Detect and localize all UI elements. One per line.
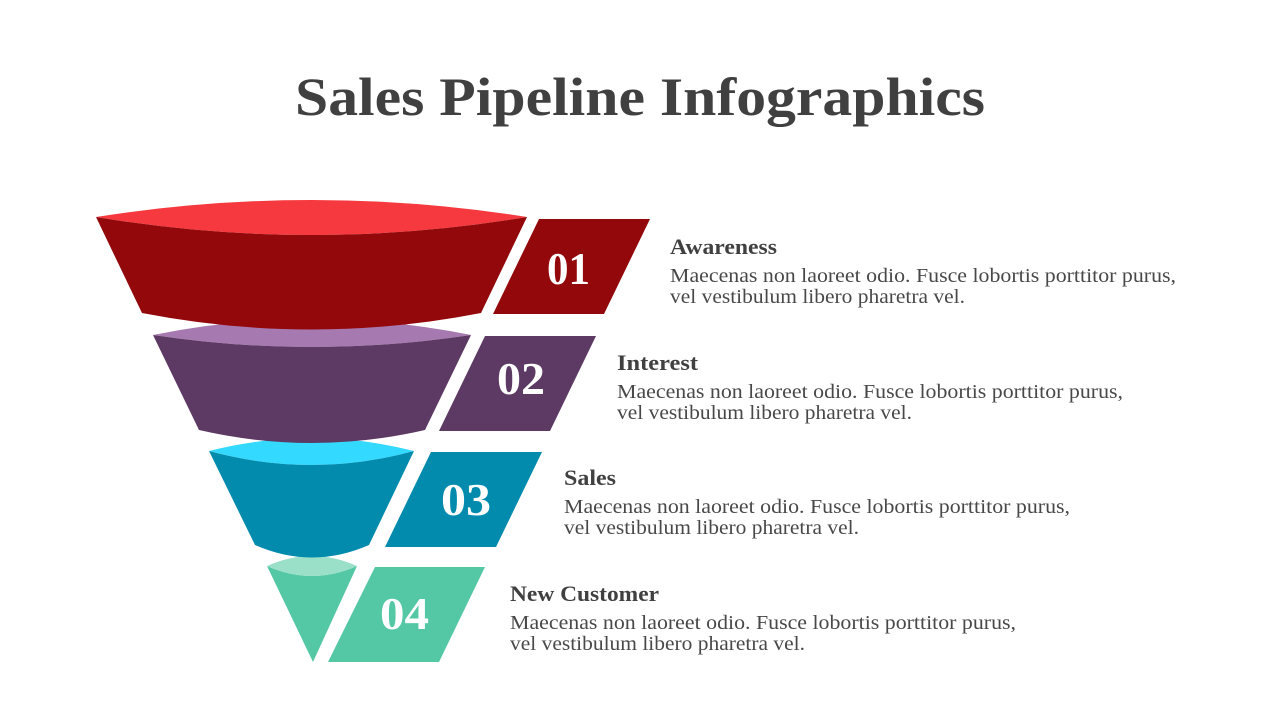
step 03: text block: [564, 465, 1070, 539]
step 02: text block: Interest: [617, 350, 699, 375]
funnel segment 2: [153, 319, 471, 443]
step 01: number tag: 01: [547, 244, 590, 294]
step 04: text block: [510, 581, 1016, 655]
funnel segment 1: [96, 200, 527, 330]
step 02: number tag: [439, 336, 596, 431]
step 01: text block: Awareness: [670, 234, 777, 259]
step 04: text block: vel vestibulum libero pharetra vel.: [510, 633, 805, 655]
step 02: text block: Maecenas non laoreet odio. Fusce lobortis porttitor purus,: [617, 381, 1123, 403]
funnel segment 3: [209, 438, 414, 558]
step 01: text block: vel vestibulum libero pharetra vel.: [670, 286, 965, 308]
step 04: text block: Maecenas non laoreet odio. Fusce lobortis porttitor purus,: [510, 612, 1016, 634]
step 03: text block: Sales: [564, 465, 616, 490]
step 02: text block: [617, 350, 1123, 424]
step 01: text block: [670, 234, 1176, 308]
step 04: number tag: [328, 567, 485, 662]
step 04: text block: New Customer: [510, 581, 659, 606]
step 01: text block: Maecenas non laoreet odio. Fusce lobortis porttitor purus,: [670, 265, 1176, 287]
funnel: [96, 200, 527, 662]
step 03: number tag: [385, 452, 542, 547]
funnel segment 4: [267, 556, 357, 662]
step 01: number tag: [493, 219, 650, 314]
title: Sales Pipeline Infographics: [295, 67, 985, 127]
step 02: text block: vel vestibulum libero pharetra vel.: [617, 402, 912, 424]
step 03: text block: Maecenas non laoreet odio. Fusce lobortis porttitor purus,: [564, 496, 1070, 518]
step 03: number tag: 03: [441, 475, 491, 525]
step 03: text block: vel vestibulum libero pharetra vel.: [564, 517, 859, 539]
step 04: number tag: 04: [380, 589, 429, 639]
step 02: number tag: 02: [497, 354, 545, 404]
